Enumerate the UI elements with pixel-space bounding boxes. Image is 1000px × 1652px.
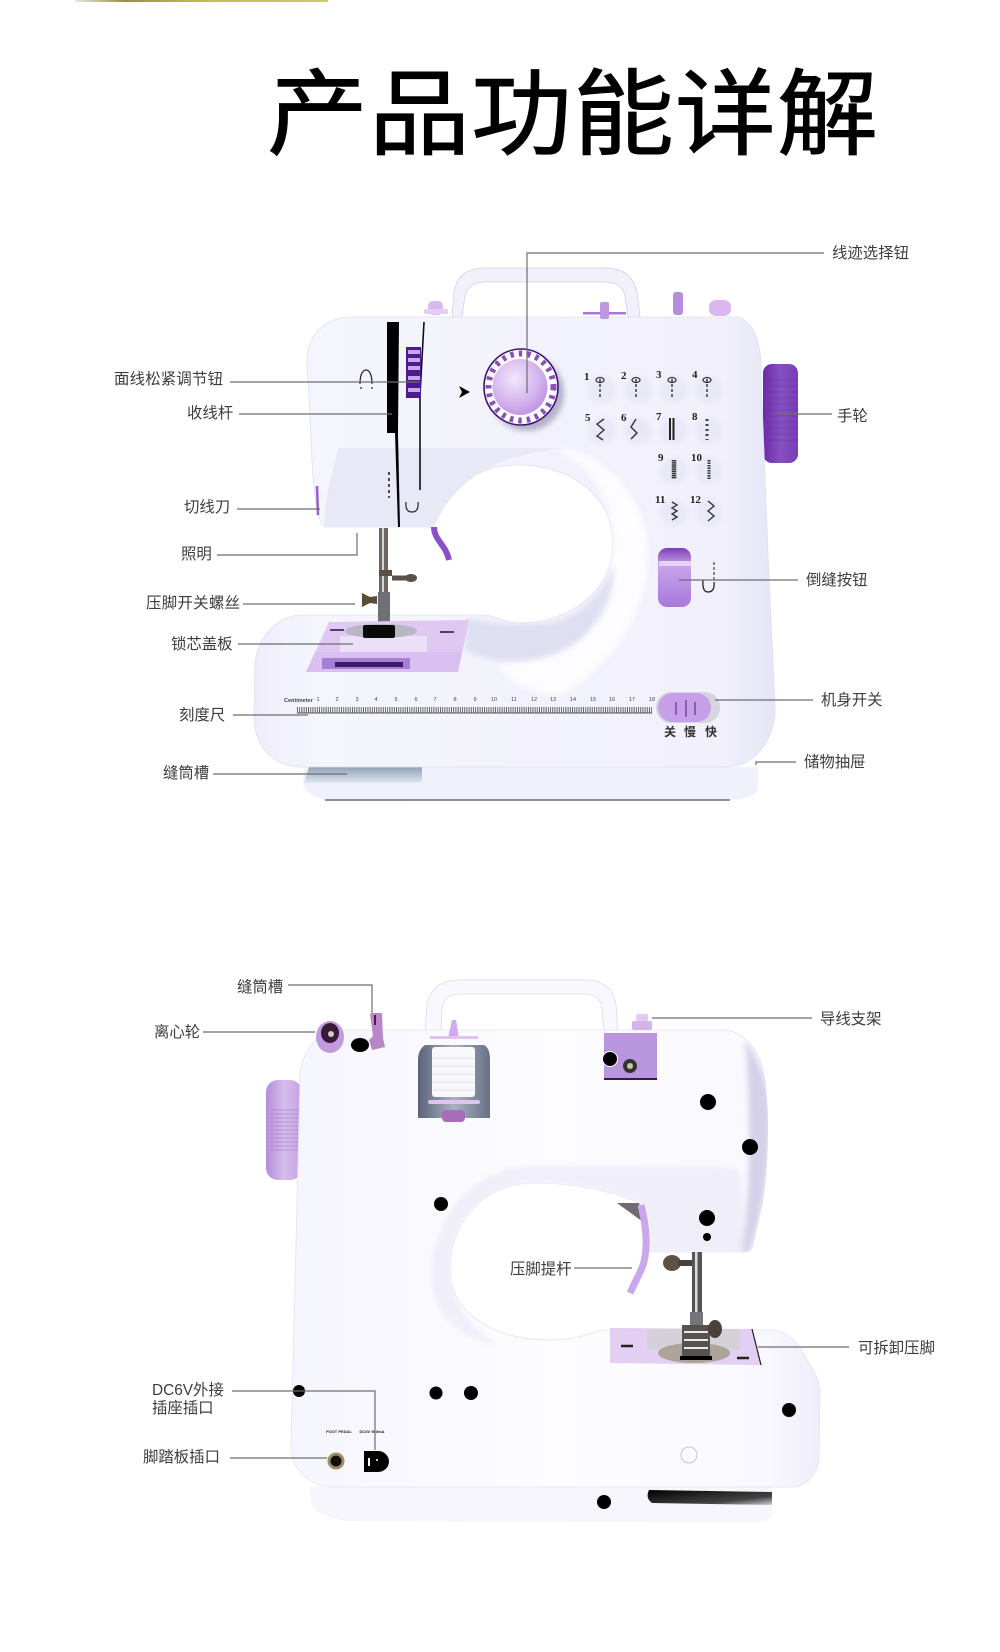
stitch pattern buttons: 11 bbox=[655, 494, 665, 506]
DC power socket bbox=[360, 1429, 389, 1472]
stitch pattern buttons: 6 bbox=[621, 412, 627, 424]
handwheel bbox=[763, 364, 798, 463]
ruler: 18 bbox=[649, 697, 655, 703]
ruler bbox=[284, 697, 655, 713]
face plate edge bbox=[420, 322, 424, 490]
reverse button bbox=[658, 548, 714, 607]
top knobs bbox=[424, 292, 731, 319]
machine base foot bbox=[303, 767, 758, 801]
ruler: 5 bbox=[394, 697, 398, 703]
callouts rear view bbox=[143, 978, 935, 1466]
bobbin winder knob bbox=[316, 1021, 344, 1053]
ruler: 9 bbox=[473, 697, 477, 703]
presser foot lever bbox=[434, 527, 449, 560]
stitch pattern buttons: 3 bbox=[656, 369, 662, 381]
label: handwheel: 手轮 bbox=[837, 407, 868, 425]
stitch pattern buttons: 7 bbox=[656, 411, 662, 423]
power switch: 快 bbox=[705, 724, 717, 739]
head edge shading bbox=[742, 1040, 770, 1252]
rear needle plate bbox=[610, 1328, 761, 1365]
ruler: 14 bbox=[570, 697, 576, 703]
ruler: 13 bbox=[550, 697, 556, 703]
ruler: 16 bbox=[609, 697, 615, 703]
left marks bbox=[388, 472, 390, 498]
arch shading bbox=[432, 1166, 750, 1345]
ruler: 2 bbox=[335, 697, 339, 703]
label: thread cutter: 切线刀 bbox=[184, 498, 230, 516]
label: tension dial: 面线松紧调节钮 bbox=[114, 370, 223, 388]
label: ruler: 刻度尺 bbox=[179, 706, 225, 724]
label: storage drawer bbox=[756, 753, 866, 771]
stitch pattern buttons: 9 bbox=[658, 452, 664, 464]
label: DC socket bbox=[152, 1381, 375, 1450]
bobbin cavity bbox=[418, 1020, 490, 1122]
label: spool groove: 缝筒槽 bbox=[163, 764, 209, 782]
stitch pattern buttons: 10 bbox=[691, 452, 702, 464]
stitch pattern buttons: 5 bbox=[585, 412, 591, 424]
label: ruler bbox=[179, 706, 308, 724]
needle bar and presser bbox=[362, 528, 417, 626]
tension window bbox=[406, 347, 421, 398]
screw holes bbox=[293, 1094, 796, 1509]
label: handwheel bbox=[775, 407, 868, 425]
label: lighting: 照明 bbox=[181, 545, 212, 563]
label: presser foot screw: 压脚开关螺丝 bbox=[146, 594, 240, 612]
ruler: 15 bbox=[590, 697, 596, 703]
ruler: 1 bbox=[316, 697, 320, 703]
DC power socket: DC6V 500mA bbox=[360, 1429, 385, 1434]
thread guide post bbox=[632, 1014, 652, 1030]
purple bracket bbox=[602, 1033, 657, 1080]
label: presser lever: 压脚提杆 bbox=[510, 1260, 572, 1278]
label: reverse button: 倒缝按钮 bbox=[806, 571, 868, 589]
label: pedal socket: 脚踏板插口 bbox=[143, 1448, 220, 1466]
top image strip bbox=[75, 0, 328, 2]
power switch: 关 bbox=[664, 724, 676, 739]
machine body bbox=[254, 317, 775, 767]
label: thread guide: 导线支架 bbox=[820, 1010, 882, 1028]
ruler: 3 bbox=[355, 697, 359, 703]
lever housing shadow bbox=[617, 1203, 643, 1222]
label: spool slot bbox=[237, 978, 372, 1013]
rear body bbox=[291, 1030, 820, 1487]
sewing machine front view bbox=[254, 268, 798, 801]
label: spool slot: 缝筒槽 bbox=[237, 978, 283, 996]
spool pin and hole bbox=[351, 1013, 385, 1052]
label: thread cutter bbox=[184, 498, 320, 516]
label: removable foot: 可拆卸压脚 bbox=[858, 1339, 935, 1357]
rear handwheel bbox=[266, 1080, 302, 1180]
title: 产品功能详解 bbox=[267, 39, 879, 175]
thread spool groove bbox=[304, 767, 422, 783]
thread U symbol bbox=[406, 502, 418, 512]
ruler: 6 bbox=[414, 697, 418, 703]
head lower shading bbox=[325, 448, 560, 527]
rear foot with slot bbox=[310, 1487, 772, 1523]
lever rear bbox=[630, 1205, 646, 1293]
power switch: 慢 bbox=[684, 724, 696, 739]
callouts front view bbox=[114, 244, 909, 782]
label: DC socket: DC6V外接 bbox=[152, 1381, 224, 1399]
label: stitch selector bbox=[527, 244, 909, 393]
thread cutter bbox=[317, 486, 318, 515]
ruler: 8 bbox=[453, 697, 457, 703]
arch lower shading bbox=[465, 565, 614, 662]
foot pedal jack: FOOT PEDAL bbox=[326, 1429, 352, 1434]
label: presser lever bbox=[510, 1260, 632, 1278]
label: take-up lever: 收线杆 bbox=[187, 404, 233, 422]
ruler: 10 bbox=[491, 697, 497, 703]
ruler: 12 bbox=[531, 697, 537, 703]
label: storage drawer: 储物抽屉 bbox=[804, 753, 866, 771]
selection dial bbox=[484, 349, 564, 431]
black thread slot bbox=[387, 322, 400, 527]
stitch pattern buttons: 2 bbox=[621, 370, 627, 382]
ruler: Centimeter bbox=[284, 698, 314, 704]
sewing machine rear view bbox=[266, 980, 820, 1523]
label: winder: 离心轮 bbox=[154, 1023, 200, 1041]
ruler: 7 bbox=[433, 697, 437, 703]
power switch bbox=[656, 692, 720, 739]
stitch pattern buttons bbox=[584, 369, 723, 527]
ruler: 17 bbox=[629, 697, 635, 703]
stitch pattern buttons: 4 bbox=[692, 369, 698, 381]
label: DC socket: 插座插口 bbox=[152, 1399, 214, 1417]
arrow pointer bbox=[459, 386, 470, 398]
label: power switch: 机身开关 bbox=[821, 691, 883, 709]
stitch pattern buttons: 12 bbox=[690, 494, 702, 506]
round plug bbox=[681, 1447, 697, 1463]
label: stitch selector: 线迹选择钮 bbox=[832, 244, 909, 262]
stitch pattern buttons: 1 bbox=[584, 371, 590, 383]
tension symbol bbox=[360, 370, 372, 389]
ruler: 4 bbox=[374, 697, 378, 703]
rear needle bar and foot bbox=[663, 1252, 722, 1360]
label: bobbin cover: 锁芯盖板 bbox=[171, 635, 233, 653]
ruler: 11 bbox=[511, 697, 517, 703]
arch highlight crescent bbox=[500, 448, 648, 695]
base shadow line bbox=[325, 799, 730, 801]
foot pedal jack bbox=[326, 1429, 352, 1470]
handle bbox=[452, 268, 640, 317]
label: lighting bbox=[181, 533, 357, 563]
stitch pattern buttons: 8 bbox=[692, 411, 698, 423]
rear handle bbox=[425, 980, 618, 1033]
bobbin cover plate bbox=[306, 620, 469, 672]
